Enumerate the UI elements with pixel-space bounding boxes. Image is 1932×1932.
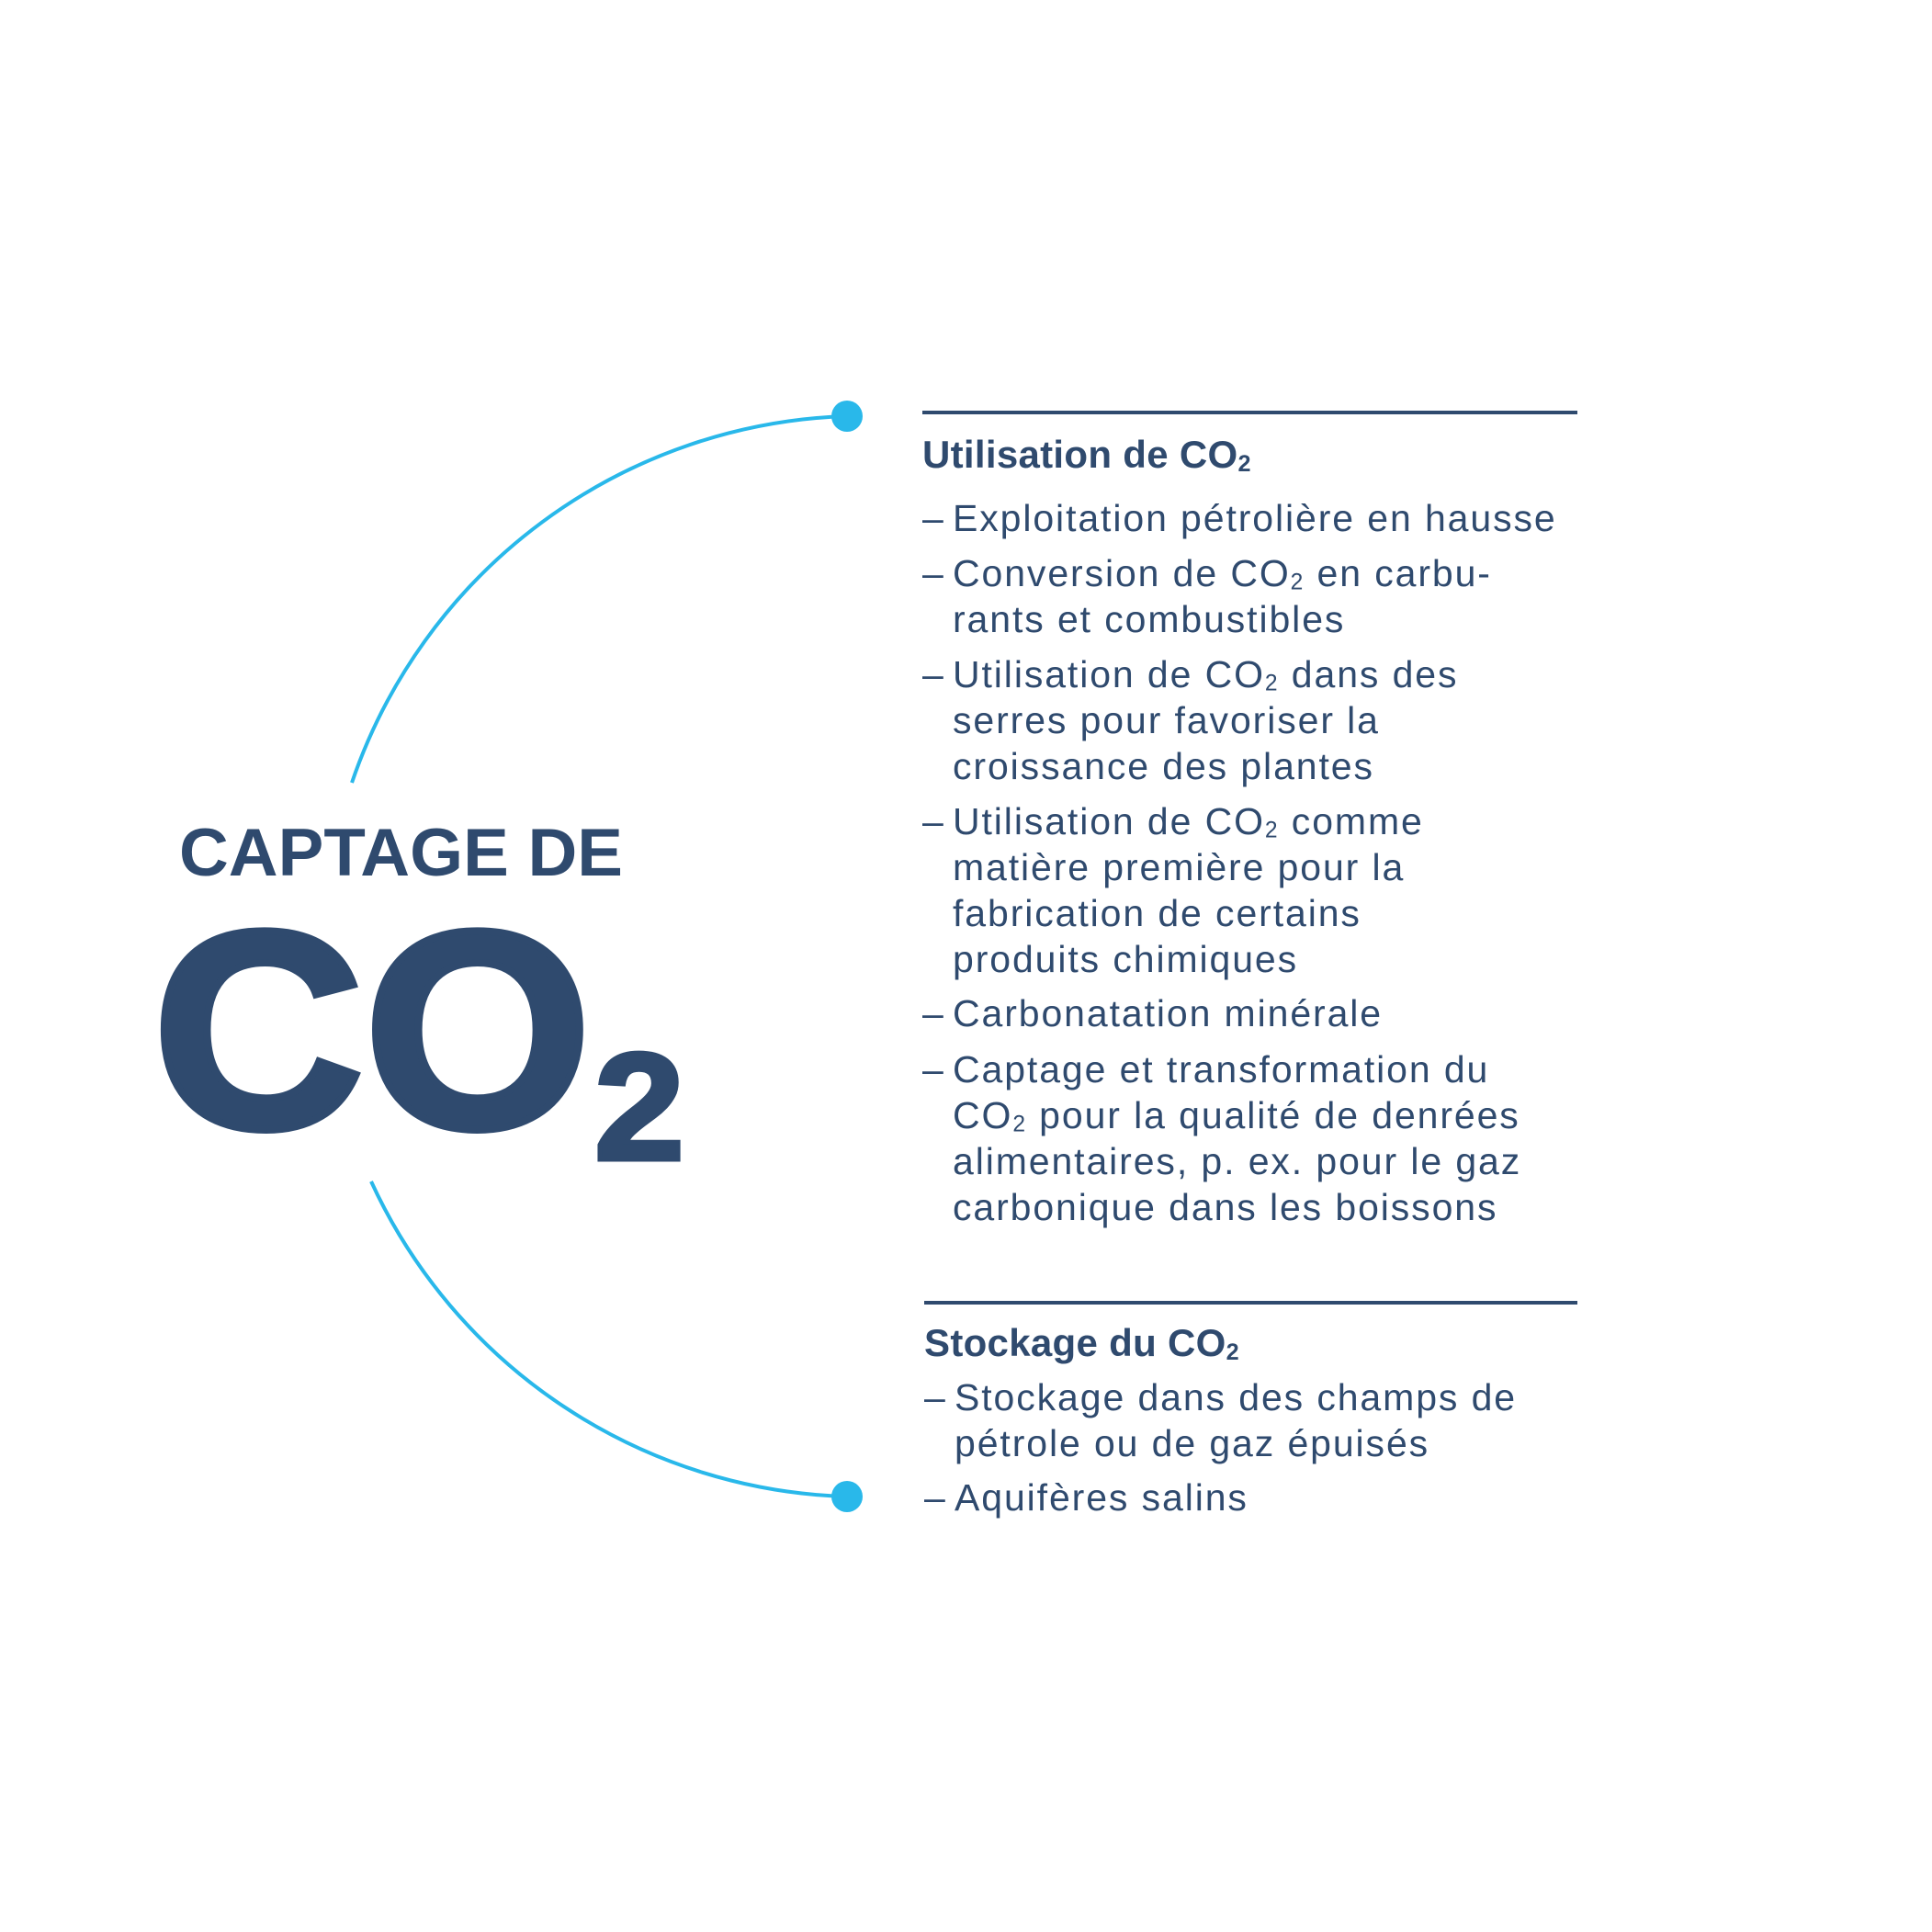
item: aquifères: – [924,1476,947,1519]
item 2: rants et combustibles [953,598,1345,640]
item 3: – [922,653,945,695]
item 4: produits chimiques [953,938,1298,980]
heading: Utilisation de CO2: Utilisation de CO2 [922,433,1251,477]
item: champs [924,1376,1517,1464]
title: CAPTAGE DE: CAPTAGE DE [179,816,623,890]
item 6: alimentaires, p. ex. pour le gaz [953,1140,1521,1182]
item 3: Utilisation de CO2 dans des [953,653,1458,696]
item 6: – [922,1048,945,1090]
item 4: matière première pour la [953,846,1405,888]
arc: bottom [371,1181,863,1512]
item 4: – [922,800,945,842]
item 4: fabrication de certains [953,892,1361,934]
item 1: – [922,497,945,539]
item 2: – [922,552,945,594]
heading: Stockage du CO2: Stockage du CO2 [924,1321,1239,1365]
item 5: – [922,992,945,1034]
list: stockage items [924,1376,1517,1519]
item 1: Exploitation pétrolière en hausse [953,497,1557,539]
title: CO2: CO [153,873,592,1187]
item 3 [922,653,1458,787]
item 6: carbonique dans les boissons [953,1186,1497,1228]
list: utilisation items [922,497,1557,1228]
item 4 [922,800,1424,980]
item 2 [922,552,1492,640]
item: champs: Stockage dans des champs de [955,1376,1517,1418]
item 3: croissance des plantes [953,745,1374,787]
item 3: serres pour favoriser la [953,699,1380,741]
arc: top [352,401,863,783]
rule: stockage [924,1301,1577,1305]
item 6: Captage et transformation du [953,1048,1489,1090]
item 6 [922,1048,1521,1228]
item: champs: – [924,1376,947,1418]
item 2: Conversion de CO2 en carbu- [953,552,1492,595]
item: aquifères: Aquifères salins [955,1476,1248,1519]
item 6: CO2 pour la qualité de denrées [953,1094,1520,1137]
item 5: Carbonatation minérale [953,992,1383,1034]
rule: utilisation [922,411,1577,414]
title: CO2: 2 [594,1022,684,1192]
item 4: Utilisation de CO2 comme [953,800,1424,843]
item: champs: pétrole ou de gaz épuisés [955,1422,1429,1464]
